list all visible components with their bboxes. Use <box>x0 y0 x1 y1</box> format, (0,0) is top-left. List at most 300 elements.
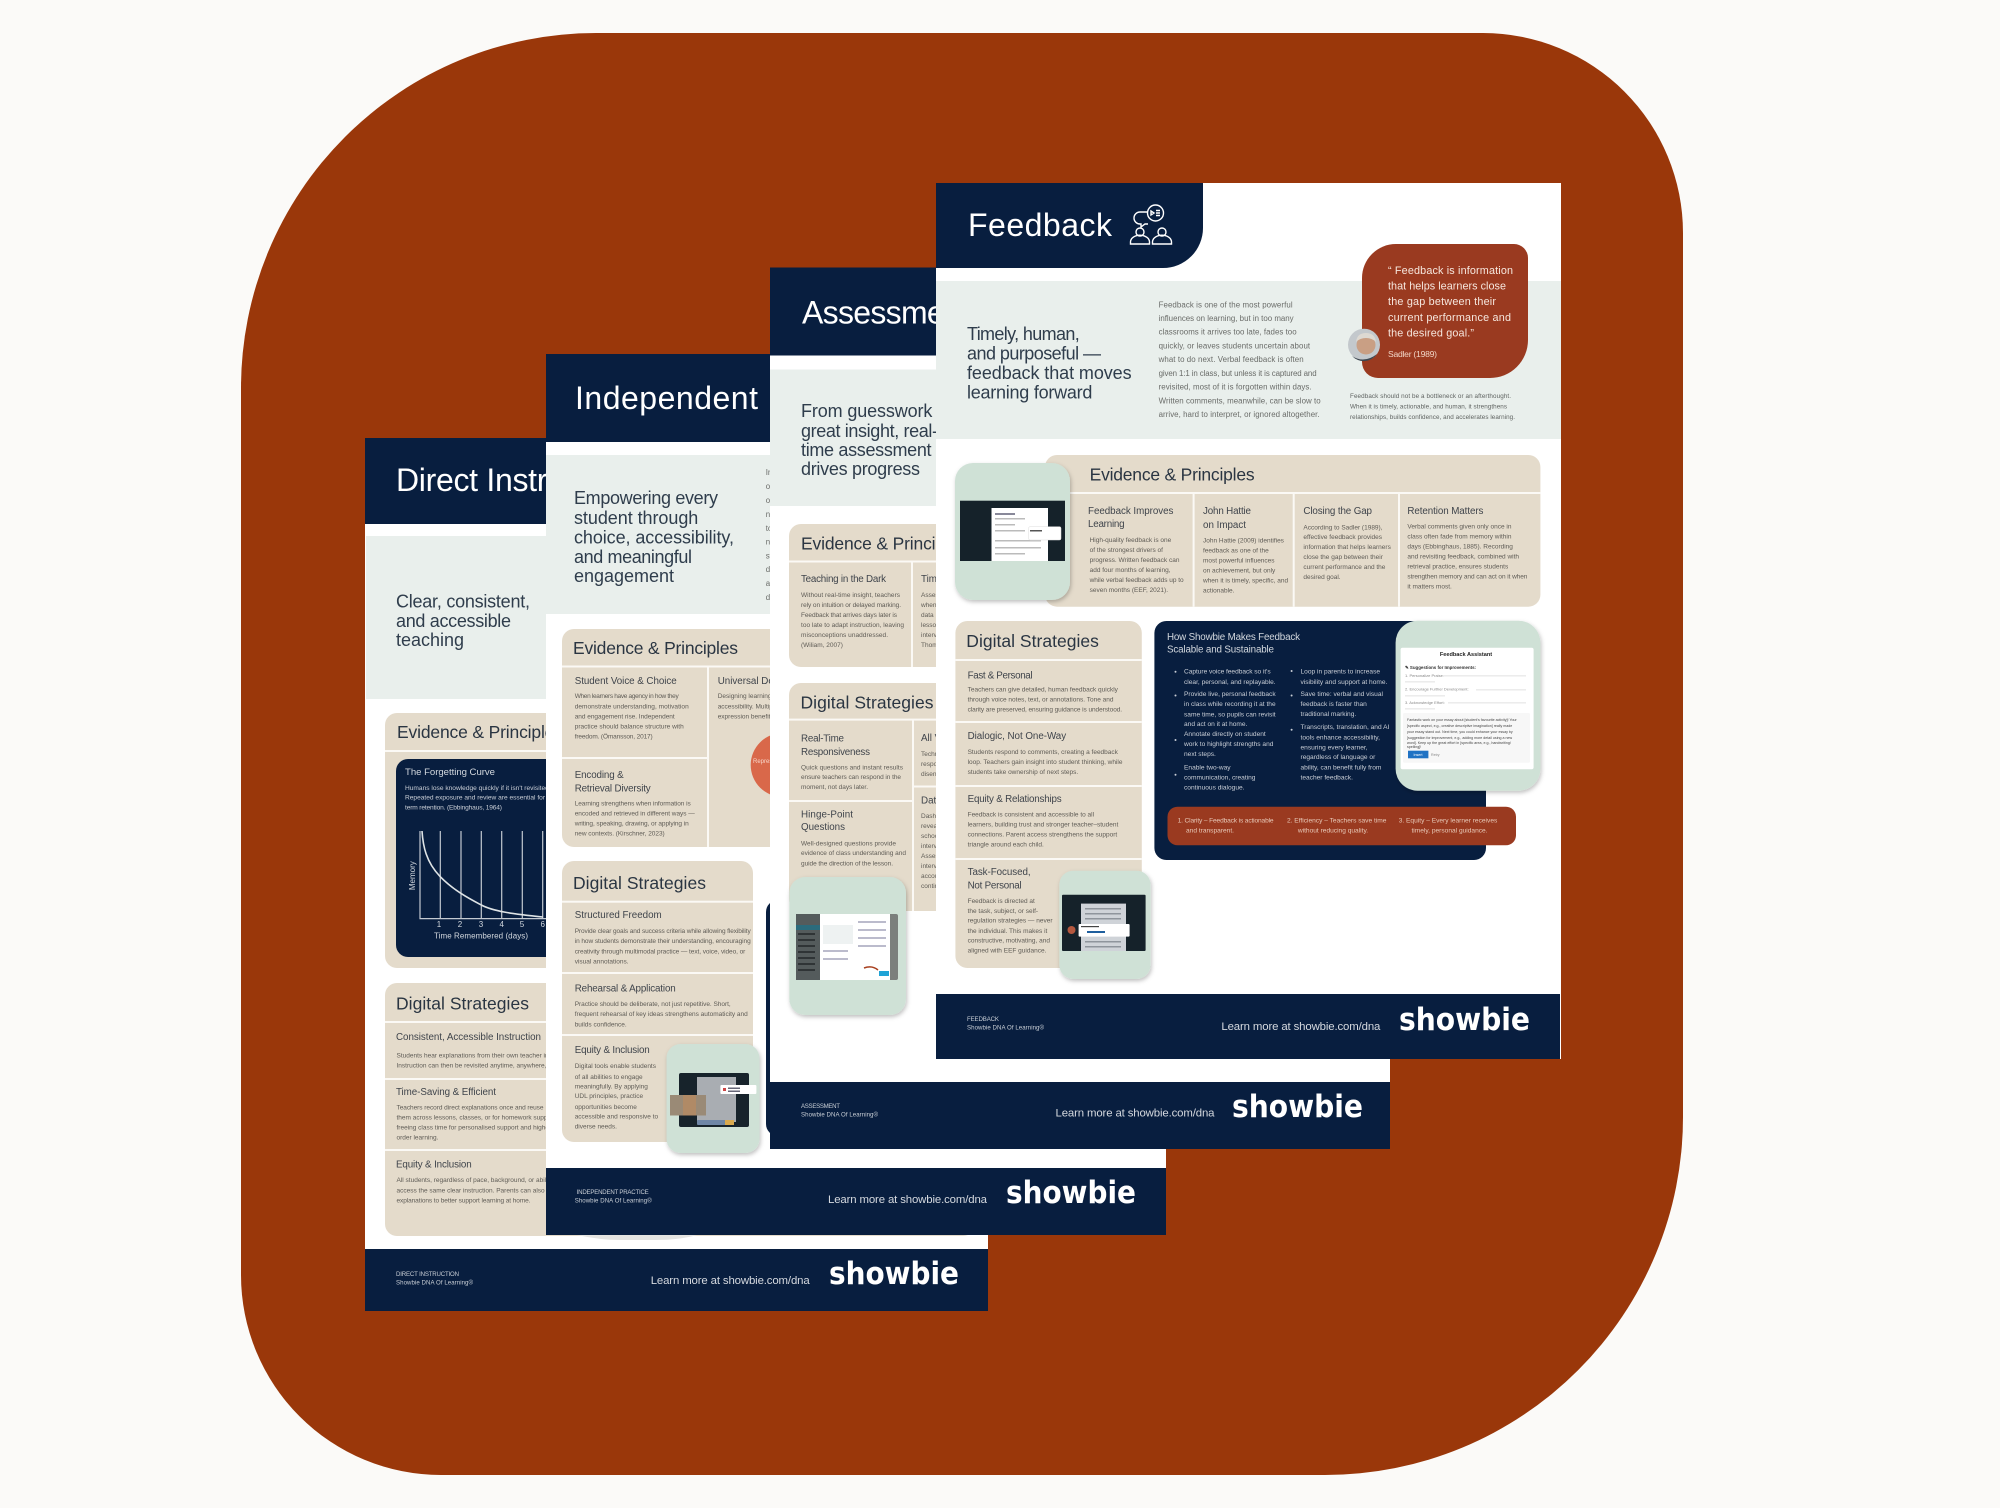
sheet 3 digital strategies panel: Digital Strategies <box>800 693 934 713</box>
sheet 2 tagline band: engagement <box>574 566 674 586</box>
bullet list: column one: and act on it at home. <box>1184 721 1248 728</box>
quote card: the desired goal.” <box>1388 328 1474 340</box>
sheet 1 evidence panel <box>385 713 975 968</box>
strategy: fast and personal: Fast & Personal <box>968 671 1033 682</box>
bullet list: column two: feedback is faster than <box>1300 701 1367 708</box>
bullet list: column one: Annotate directly on student <box>1184 731 1266 738</box>
sheet 3 evidence panel: Without real-time insight, teachers <box>801 592 901 599</box>
forgetting curve chart: Memory <box>408 861 417 890</box>
forgetting curve chart: 1 <box>437 920 442 929</box>
intro paragraph: arrive, hard to interpret, or ignored altogether. <box>1159 410 1320 419</box>
strategy: dialogic: students take ownership of next steps. <box>968 769 1078 776</box>
sheet 2 tagline band: to the <box>766 524 786 533</box>
sheet 2 evidence panel: Designing learning <box>718 693 772 700</box>
sheet 1 digital strategies panel: All students, regardless of pace, background, or ability, can <box>396 1177 567 1184</box>
sheet 1 footer: Learn more at showbie.com/dna <box>651 1275 810 1287</box>
sheet 3 evidence panel: lessons <box>921 622 944 629</box>
sheet 1 digital strategies panel: explanations to better support learning at home. <box>396 1197 531 1204</box>
sheet shadow peeking below independent practice <box>577 1235 697 1240</box>
sheet 2 digital strategies panel: builds confidence. <box>575 1021 627 1028</box>
bullet list: column two: regardless of language or <box>1300 754 1376 761</box>
sheet 3 header: Assessment <box>802 294 970 330</box>
strategy: fast and personal <box>968 671 1122 714</box>
bullet list: column two: ensuring every learner, <box>1300 744 1368 751</box>
column: retention matters <box>1407 506 1528 591</box>
forgetting curve chart: Time Remembered (days) <box>434 932 528 941</box>
column: feedback improves learning: add four months of learning, <box>1090 567 1171 574</box>
sheet 2 footer: INDEPENDENT PRACTICE <box>577 1189 649 1196</box>
sheet 3 footer: Learn more at showbie.com/dna <box>1056 1108 1215 1120</box>
sheet 3 digital strategies panel: Questions <box>801 822 845 833</box>
mint card: feedback assistant screenshot: word]. Keep up the great effort in [specific area, e.g., handwriting/ <box>1407 741 1511 745</box>
column: retention matters: class often fade from memory within <box>1407 534 1512 541</box>
column: john hattie: feedback as one of the <box>1203 548 1269 555</box>
column: john hattie: most powerful influences <box>1203 558 1275 565</box>
sheet 4 header: Feedback <box>968 207 1113 243</box>
mint card: feedback assistant screenshot: Feedback Assistant <box>1440 652 1492 658</box>
sheet 3 evidence panel: Assessment <box>921 592 957 599</box>
strategy: fast and personal: through voice notes, text, or annotations. Tone and <box>968 697 1114 704</box>
sheet 4 footer: Learn more at showbie.com/dna <box>1221 1021 1381 1033</box>
mint card: feedback assistant screenshot: [suggestion for improvement, e.g., adding more detail using a new <box>1407 736 1512 740</box>
column: john hattie: John Hattie <box>1203 506 1252 517</box>
mint card: feedback assistant screenshot: 1. Personalize Praise: <box>1405 673 1444 678</box>
mint screenshot card: teacher feedback <box>955 463 1070 600</box>
red bar: clarity, efficiency, equity: timely, personal guidance. <box>1411 828 1488 835</box>
strategy: dialogic: Students respond to comments, creating a feedback <box>968 749 1119 756</box>
column: retention matters: Retention Matters <box>1407 506 1483 517</box>
strategy: fast and personal: clarity are preserved, ensuring guidance is understood. <box>968 707 1122 714</box>
sheet 2 header: Independent Practice <box>575 380 887 416</box>
column: closing the gap: information that helps learners <box>1303 544 1392 551</box>
sheet 3 evidence panel: misconceptions unaddressed. <box>801 632 888 639</box>
column: retention matters: and revisiting feedback, combined with <box>1407 554 1519 561</box>
column: retention matters: retrieval practice, ensures students <box>1407 564 1509 571</box>
supporting note: relationships, builds confidence, and accelerates learning. <box>1350 414 1515 421</box>
column: john hattie: actionable. <box>1203 588 1235 595</box>
navy panel: how showbie makes feedback scalable: How Showbie Makes Feedback <box>1167 632 1300 643</box>
strategy: task focused: aligned with EEF guidance. <box>968 948 1047 955</box>
column: closing the gap: effective feedback provides <box>1303 534 1383 541</box>
column: feedback improves learning: Feedback Improves <box>1088 506 1173 517</box>
sheet 3 digital strategies panel: Well-designed questions provide <box>801 841 896 848</box>
sheet 2 digital strategies panel: Equity & Inclusion <box>575 1045 650 1056</box>
sheet 1 footer: DIRECT INSTRUCTION <box>396 1271 459 1278</box>
sheet 1 digital strategies panel: Consistent, Accessible Instruction <box>396 1032 541 1043</box>
intro paragraph <box>1158 300 1321 419</box>
sheet 1 digital strategies panel: Teachers record direct explanations once and reuse <box>396 1104 544 1111</box>
column: retention matters: strengthen memory and can act on it when <box>1407 574 1528 581</box>
sheet 3 digital strategies panel: Assessment <box>921 853 957 860</box>
bullet list: column two: tools enhance accessibility, <box>1300 734 1380 741</box>
icon: people with speech bubbles <box>1130 205 1172 244</box>
sheet 3 tagline band: From guesswork to <box>801 401 952 421</box>
forgetting curve chart: 3 <box>479 920 484 929</box>
sheet 3 digital strategies panel: ensure teachers can respond in the <box>801 774 901 781</box>
sheet 3 digital strategies panel: Real-Time <box>801 733 845 744</box>
red bar: clarity, efficiency, equity: 1. Clarity – Feedback is actionable <box>1178 818 1274 825</box>
bullet list: column one: Provide live, personal feedback <box>1184 691 1276 698</box>
forgetting curve chart: The Forgetting Curve <box>405 767 495 778</box>
sheet 3 digital strategies panel: Responsiveness <box>801 747 870 758</box>
column: john hattie <box>1202 506 1289 595</box>
column: feedback improves learning: of the strongest drivers of <box>1090 547 1163 554</box>
bullet list: column one: continuous dialogue. <box>1184 784 1245 791</box>
intro paragraph: quickly, or leaves students uncertain about <box>1159 342 1311 350</box>
sheet 1 digital strategies panel: them across lessons, classes, or for homework support, <box>396 1115 557 1122</box>
intro paragraph: Written comments, meanwhile, can be slow to <box>1159 396 1321 406</box>
sheet 3 digital strategies panel: intervene <box>921 843 948 850</box>
sheet 2 tagline band: and <box>766 579 779 588</box>
bullet list: column one: in class while recording it at the <box>1184 701 1276 708</box>
sheet 2 evidence panel: demonstrate understanding, motivation <box>575 704 689 711</box>
strategy: fast and personal: Teachers can give detailed, human feedback quickly <box>968 687 1119 694</box>
sheet 3 evidence panel: Timely Insight <box>921 574 981 585</box>
sheet 3 tagline band: drives progress <box>801 459 920 479</box>
sheet 2 evidence panel: practice should balance structure with <box>575 724 684 731</box>
sheet 3 digital strategies panel: Technology <box>921 751 955 758</box>
sheet 3 evidence panel: when <box>920 602 937 609</box>
mint card: feedback assistant screenshot <box>1396 621 1540 791</box>
sheet 2 footer: Showbie DNA Of Learning® <box>575 1198 652 1205</box>
mint card: feedback assistant screenshot: spelling]! <box>1407 745 1421 749</box>
sheet 3 header <box>770 268 1070 356</box>
bullet list: column two <box>1291 668 1389 781</box>
quote card: that helps learners close <box>1388 280 1506 292</box>
sheet 4 footer: FEEDBACK <box>967 1016 999 1023</box>
sheet 2 tagline band: one of the <box>766 482 801 491</box>
intro paragraph: given 1:1 in class, but unless it is captured and <box>1159 369 1317 378</box>
sheet 3 digital strategies panel: disengaged <box>921 771 955 778</box>
sheet: Feedback <box>936 183 1561 1059</box>
bullet list: column one: work to highlight strengths and <box>1183 741 1274 748</box>
bullet list: column two: traditional marking. <box>1300 711 1356 718</box>
sheet 3 digital strategies panel <box>789 683 1379 911</box>
sheet 3 evidence panel: Feedback that arrives days later is <box>801 612 898 619</box>
strategy: task focused: Not Personal <box>968 881 1022 892</box>
sheet 2 tagline band: students <box>766 552 796 561</box>
tagline: learning forward <box>967 383 1092 403</box>
sheet 1 header <box>365 438 765 524</box>
forgetting curve chart: 6 <box>540 920 545 929</box>
sheet 2 tagline band: deep <box>766 565 784 574</box>
sheet 2 mint screenshot card <box>666 1044 760 1153</box>
sheet 2 digital strategies panel: Structured Freedom <box>575 910 662 921</box>
strategy: task focused: the individual. This makes it <box>968 928 1048 935</box>
sheet 2 tagline band: choice, accessibility, <box>574 528 734 548</box>
bullet list: column one <box>1174 668 1276 791</box>
column: retention matters: it matters most. <box>1407 584 1452 591</box>
sheet 2 tagline band: and meaningful <box>574 547 692 567</box>
tagline: feedback that moves <box>967 363 1132 383</box>
sheet 1 footer: showbie <box>829 1256 959 1292</box>
sheet 2 evidence panel: new contexts. (Kirschner, 2023) <box>575 831 665 838</box>
sheet 2 digital strategies panel: visual annotations. <box>575 958 629 965</box>
sheet: Assessment <box>770 268 1390 1149</box>
sheet 3 digital strategies panel: Quick questions and instant results <box>801 765 904 772</box>
quote card: current performance and <box>1388 312 1511 324</box>
strategy: task focused: Task-Focused, <box>968 867 1031 878</box>
quote card: Sadler (1989) <box>1388 349 1437 359</box>
forgetting curve chart <box>396 759 796 957</box>
mint card: feedback assistant screenshot: your essay stand out. Next time, you could enhance your essay by <box>1407 730 1513 734</box>
portrait: Sadler <box>1348 329 1380 361</box>
sheet 2 footer <box>546 1168 1166 1235</box>
quote card: “ Feedback is information <box>1388 265 1513 277</box>
strategy: task focused: constructive, motivating, and <box>968 938 1050 945</box>
sheet 3 digital strategies panel: guide the direction of the lesson. <box>801 860 893 867</box>
sheet 3 tagline band: great insight, real- <box>801 421 938 441</box>
sheet 1 tagline band: Clear, consistent, <box>396 592 530 612</box>
sheet: Independent Practice <box>546 354 1166 1235</box>
sheet 3 evidence panel: Teaching in the Dark <box>801 574 886 585</box>
sheet 2 tagline band: digital <box>766 593 787 602</box>
mint screenshot card: voice feedback <box>1059 871 1151 979</box>
sheet 2 evidence panel: freedom. (Ömansson, 2017) <box>575 733 653 741</box>
sheet 3 mint screenshot card <box>789 877 906 1015</box>
sheet 2 tagline band: student through <box>574 508 698 528</box>
sheet 3 evidence panel: data <box>921 612 934 619</box>
sheet 3 evidence panel <box>789 524 1379 667</box>
sheet 2 digital strategies panel: accessible and responsive to <box>575 1114 659 1121</box>
column: retention matters: days (Ebbinghaus, 1885). Recording <box>1407 544 1513 551</box>
sheet 4 footer: showbie <box>1399 1002 1530 1038</box>
supporting note <box>1350 393 1515 421</box>
strategy: dialogic <box>968 731 1123 776</box>
column: john hattie: on Impact <box>1203 520 1246 531</box>
strategy: equity and relationships <box>968 794 1118 849</box>
column: feedback improves learning: while verbal feedback adds up to <box>1089 577 1184 584</box>
column: closing the gap: According to Sadler (1989), <box>1303 524 1383 531</box>
sheet 2 digital strategies panel: opportunities become <box>575 1104 637 1111</box>
bullet list: column one: Enable two-way <box>1184 764 1231 771</box>
strategy: equity and relationships: triangle around each child. <box>968 842 1044 849</box>
sheet 1 digital strategies panel: freeing class time for personalised support and higher- <box>396 1124 553 1131</box>
sheet 2 evidence panel: Evidence & Principles <box>573 638 738 658</box>
sheet 2 paper <box>546 354 1166 1235</box>
sheet 3 digital strategies panel: continuous <box>921 883 953 890</box>
strategy: equity and relationships: learners, building trust and stronger teacher–student <box>968 822 1118 829</box>
forgetting curve chart: 2 <box>458 920 463 929</box>
sheet 3 digital strategies panel: evidence of class understanding and <box>801 850 906 857</box>
sheet 2 digital strategies panel: Practice should be deliberate, not just repetitive. Short, <box>575 1001 731 1008</box>
red bar: clarity, efficiency, equity: without reducing quality. <box>1297 828 1368 835</box>
sheet 4 tagline band <box>936 281 1561 439</box>
sheet 2 evidence panel: Encoding & <box>575 770 624 781</box>
sheet: Direct Instruction <box>365 438 988 1311</box>
sheet 1 digital strategies panel: Digital Strategies <box>396 993 529 1013</box>
mint card: feedback assistant screenshot: Retry <box>1431 753 1440 757</box>
supporting note: Feedback should not be a bottleneck or an afterthought. <box>1350 393 1511 400</box>
sheet 3 footer: showbie <box>1232 1089 1363 1125</box>
red bar: clarity, efficiency, equity: 3. Equity – Every learner receives <box>1399 818 1498 825</box>
sheet 3 digital strategies panel: responses <box>921 761 952 768</box>
mint card: feedback assistant screenshot: Insert <box>1414 753 1422 757</box>
background shape: rust rounded blob <box>241 33 1683 1475</box>
sheet 1 evidence panel: Evidence & Principles <box>397 722 563 742</box>
column: feedback improves learning: progress. Written feedback can <box>1090 557 1180 564</box>
column: john hattie: on achievement, but only <box>1203 568 1276 575</box>
sheet 3 evidence panel: interventions <box>921 632 959 639</box>
bullet list: column two: Transcripts, translation, and AI <box>1300 724 1389 731</box>
sheet 2 navy panel edge <box>766 900 1066 1136</box>
sheet 3 digital strategies panel: reveal <box>921 823 939 830</box>
sheet 1 digital strategies panel: Students hear explanations from their own teacher in class. <box>396 1052 567 1059</box>
tagline: Timely, human, <box>967 324 1080 344</box>
sheet 3 evidence panel: (Wiliam, 2007) <box>801 642 843 649</box>
forgetting curve chart: 5 <box>520 920 525 929</box>
sheet 2 evidence panel: When learners have agency in how they <box>575 693 679 700</box>
bullet list: column one: next steps. <box>1184 751 1216 758</box>
sheet 3 evidence panel: Evidence & Principles <box>801 533 967 553</box>
column: feedback improves learning <box>1088 506 1184 594</box>
bullet list: column two: teacher feedback. <box>1300 774 1353 781</box>
sheet 2 digital strategies panel: in how students demonstrate their understanding, encouraging <box>575 938 751 945</box>
sheet 2 digital strategies panel: Rehearsal & Application <box>575 983 676 994</box>
sheet 4 footer <box>936 994 1560 1059</box>
sheet 2 evidence panel: Retrieval Diversity <box>575 783 651 794</box>
column: john hattie: John Hattie (2009) identifies <box>1203 538 1285 545</box>
sheet 3 evidence panel: Thomas <box>921 642 945 649</box>
mint card: feedback assistant screenshot: 3. Acknowledge Effort: <box>1405 700 1445 705</box>
sheet 2 digital strategies panel: creativity through multimodal practice — text, voice, video, or <box>575 949 746 956</box>
sheet 3 digital strategies panel: Hinge-Point <box>801 810 853 820</box>
quote card: the gap between their <box>1388 296 1496 308</box>
bullet list: column one: same time, so pupils can revisit <box>1184 711 1276 718</box>
supporting note: When it is timely, actionable, and human, it strengthens <box>1350 404 1507 411</box>
sheet 2 digital strategies panel: of all abilities to engage <box>575 1074 643 1081</box>
sheet 2 evidence panel: Student Voice & Choice <box>575 676 677 687</box>
sheet 4 paper <box>936 183 1561 1059</box>
sheet 1 paper <box>365 438 988 1311</box>
sheet 2 tagline band: Independent <box>766 468 810 477</box>
evidence and principles panel <box>1045 455 1540 607</box>
forgetting curve chart: Repeated exposure and review are essential for long- <box>405 795 562 802</box>
red bar: clarity, efficiency, equity <box>1168 807 1516 845</box>
mint card: feedback assistant screenshot: Fantastic work on your essay about [student's favourite activity]! Your <box>1407 718 1518 722</box>
intro paragraph: classrooms it arrives too late, fades too <box>1159 328 1297 336</box>
sheet 1 tagline band: and accessible <box>396 611 511 631</box>
sheet 1 digital strategies panel: Instruction can then be revisited anytime, anywhere, by pupils. <box>396 1062 576 1069</box>
sheet 3 tagline band <box>770 370 1390 506</box>
strategy: task focused: regulation strategies — never <box>968 918 1053 925</box>
bullet list: column two: visibility and support at home. <box>1300 679 1388 686</box>
column: john hattie: when it is timely, specific, and <box>1202 578 1289 585</box>
sheet 3 footer: Showbie DNA Of Learning® <box>801 1112 878 1119</box>
sheet 2 footer: showbie <box>1006 1175 1136 1211</box>
sheet 2 evidence panel: encoded and retrieved in different ways — <box>575 811 695 818</box>
mint card: feedback assistant screenshot: [specific aspect, e.g., creative descriptive imagination] really made <box>1407 724 1512 728</box>
sheet 2 header <box>546 354 946 442</box>
strategy: equity and relationships: connections. Parent access strengthens the support <box>968 832 1117 839</box>
strategy: equity and relationships: Feedback is consistent and accessible to all <box>968 812 1095 819</box>
digital strategies panel: Digital Strategies <box>966 631 1099 651</box>
forgetting curve chart: 4 <box>499 920 504 929</box>
sheet 2 digital strategies panel <box>562 861 753 1142</box>
sheet 2 tagline band: not <box>766 538 777 547</box>
intro paragraph: what to do next. Verbal feedback is often <box>1158 355 1304 364</box>
sheet 1 digital strategies panel: order learning. <box>396 1134 439 1141</box>
sheet 2 digital strategies panel: Provide clear goals and success criteria while allowing flexibility <box>575 928 751 935</box>
sheet 2 digital strategies panel: meaningfully. By applying <box>575 1084 648 1091</box>
column: closing the gap: Closing the Gap <box>1303 506 1373 517</box>
red bar: clarity, efficiency, equity: 2. Efficiency – Teachers save time <box>1287 818 1387 825</box>
sheet 2 evidence panel: expression benefits <box>718 714 774 721</box>
column: feedback improves learning: seven months (EEF, 2021). <box>1090 587 1168 594</box>
sheet 1 digital strategies panel: Time-Saving & Efficient <box>396 1087 496 1098</box>
sheet 2 tagline band <box>546 455 1166 614</box>
sheet 1 footer <box>365 1249 988 1311</box>
sheet 2 tagline band: Empowering every <box>574 488 718 508</box>
sheet 1 tagline band: teaching <box>396 630 464 650</box>
mint card: feedback assistant screenshot: ✎ Suggestions for Improvements: <box>1405 665 1477 670</box>
sheet 1 digital strategies panel: access the same clear instruction. Parents can also review <box>396 1187 566 1194</box>
red bar: clarity, efficiency, equity: and transparent. <box>1186 828 1234 835</box>
sheet 2 evidence panel: Universal Design <box>718 676 792 687</box>
forgetting curve chart: term retention. (Ebbinghaus, 1964) <box>405 805 502 812</box>
sheet 3 digital strategies panel: Dashboards <box>921 813 957 820</box>
sheet 2 digital strategies panel: UDL principles, practice <box>575 1093 643 1100</box>
strategy: task focused: Feedback is directed at <box>968 898 1035 905</box>
sheet 1 header: Direct Instruction <box>396 462 631 498</box>
bullet list: column two: Loop in parents to increase <box>1300 668 1380 675</box>
quote card <box>1348 244 1528 378</box>
mint card: feedback assistant screenshot: 2. Encourage Further Development: <box>1405 687 1469 692</box>
bullet list: column one: Capture voice feedback so it's <box>1184 668 1271 675</box>
tagline: and purposeful — <box>967 343 1101 363</box>
strategy: equity and relationships: Equity & Relationships <box>968 794 1062 805</box>
intro paragraph: revisited, most of it is forgotten within days. <box>1159 382 1312 392</box>
sheet 1 tagline band <box>366 536 988 699</box>
sheet 2 digital strategies panel: frequent rehearsal of key ideas strengthens automaticity and <box>575 1011 748 1018</box>
forgetting curve chart: Humans lose knowledge quickly if it isn't revisited. <box>405 785 551 792</box>
sheet 4 footer: Showbie DNA Of Learning® <box>967 1024 1044 1031</box>
strategy: dialogic: Dialogic, Not One-Way <box>968 731 1066 742</box>
sheet 2 digital strategies panel: Digital Strategies <box>573 873 706 893</box>
sheet 3 digital strategies panel: moment, not days later. <box>801 784 868 791</box>
sheet 2 tagline band: own <box>766 496 780 505</box>
sheet 1 footer: Showbie DNA Of Learning® <box>396 1279 474 1286</box>
sheet 2 tagline band: new <box>766 510 780 519</box>
strategy: task focused <box>968 867 1053 955</box>
column: closing the gap <box>1303 506 1392 581</box>
strategy: task focused: the task, subject, or self- <box>968 908 1038 915</box>
column: closing the gap: close the gap between their <box>1303 554 1384 561</box>
column: feedback improves learning: High-quality feedback is one <box>1090 537 1172 544</box>
sheet 3 digital strategies panel: school <box>921 833 940 840</box>
bullet list: column one: clear, personal, and replayable. <box>1184 679 1276 686</box>
navy panel: how showbie makes feedback scalable <box>1154 621 1486 860</box>
column: closing the gap: desired goal. <box>1303 574 1341 581</box>
sheet 2 evidence panel <box>562 629 1152 847</box>
intro paragraph: Feedback is one of the most powerful <box>1159 300 1293 309</box>
circle: representation <box>751 733 815 797</box>
sheet 3 evidence panel: rely on intuition or delayed marking. <box>801 602 901 609</box>
bullet list: column two: Save time: verbal and visual <box>1300 691 1383 698</box>
sheet 1 digital strategies panel: Equity & Inclusion <box>396 1160 472 1171</box>
column: feedback improves learning: Learning <box>1088 519 1125 530</box>
sheet 3 tagline band: time assessment that <box>801 440 965 460</box>
bullet list: column one: communication, creating <box>1184 774 1256 781</box>
tagline <box>967 324 1132 403</box>
sheet 3 footer <box>770 1082 1390 1149</box>
sheet 3 footer: ASSESSMENT <box>801 1103 840 1110</box>
sheet 3 digital strategies panel: accountable <box>921 873 956 880</box>
sheet 2 evidence panel: writing, speaking, drawing, or applying in <box>574 821 689 828</box>
digital strategies panel <box>955 621 1142 968</box>
sheet 2 digital strategies panel: Digital tools enable students <box>575 1063 657 1070</box>
sheet 2 footer: Learn more at showbie.com/dna <box>828 1194 988 1206</box>
